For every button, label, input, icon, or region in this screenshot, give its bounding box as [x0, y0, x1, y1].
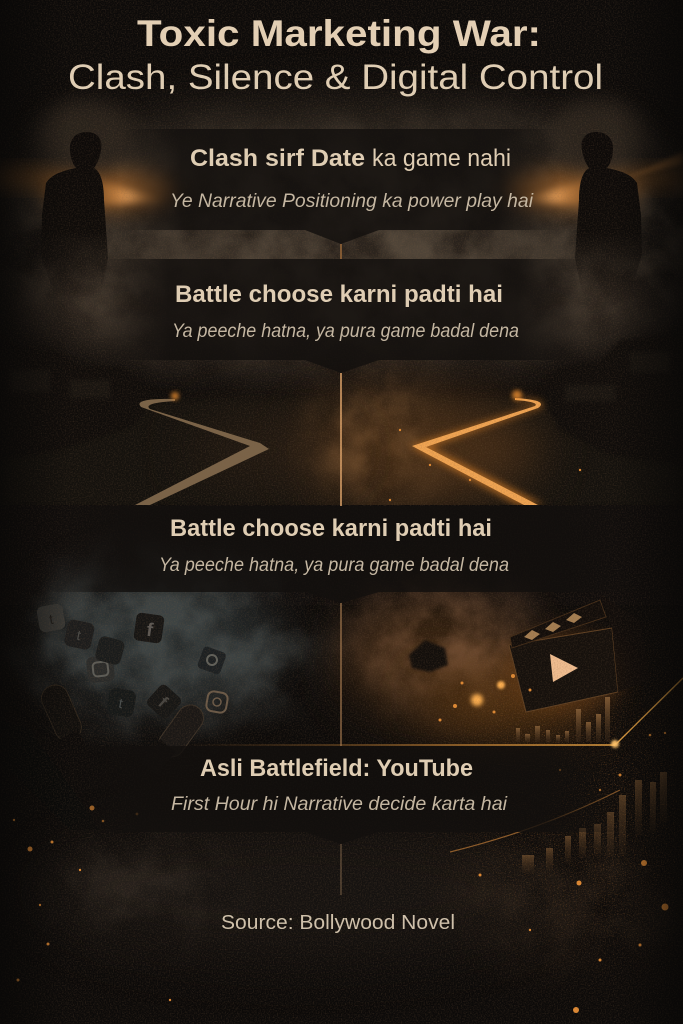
ember specks [406, 600, 683, 1002]
panel 3 shape [40, 506, 645, 603]
panel 1 heading [190, 145, 511, 172]
upper haze [10, 105, 683, 370]
panel 4 heading: Asli Battlefield: YouTube [200, 755, 473, 782]
small bar chart [516, 697, 610, 742]
large bar chart [522, 772, 667, 873]
title line 1: Toxic Marketing War: [137, 13, 541, 54]
icon: twitter faded: t [48, 611, 55, 627]
panel 3 heading: Battle choose karni padti hai [170, 515, 492, 542]
panel 1 shape [120, 129, 560, 244]
dark debris [409, 640, 448, 672]
panel 1 heading: ka game nahi [372, 145, 511, 172]
panel: clash [120, 129, 560, 244]
microphone right [141, 700, 209, 775]
icon: facebook [133, 612, 165, 644]
icon: twitter [63, 619, 95, 651]
icon: blank tile [94, 635, 126, 666]
glowing rising line [180, 678, 683, 748]
icon: instagram [86, 655, 115, 683]
left rubble [0, 350, 155, 460]
panel: battle two [40, 506, 645, 603]
panel 1 subtext: Ye Narrative Positioning ka power play hai [170, 191, 534, 212]
icon: twitter lower [106, 687, 137, 718]
title line 2: Clash, Silence & Digital Control [68, 58, 603, 97]
icon: facebook: f [145, 620, 155, 642]
road fires [171, 390, 522, 400]
social media icons [36, 603, 229, 721]
panel: battle one [100, 259, 585, 373]
panel 2 heading: Battle choose karni padti hai [175, 281, 503, 308]
panel 1 heading: Clash sirf Date [190, 145, 365, 172]
road left [135, 399, 269, 505]
clapperboard video icon [505, 594, 650, 712]
icon: twitter: t [75, 627, 82, 643]
panel 2 shape [100, 259, 585, 373]
lower scene haze [0, 505, 683, 960]
right figure glow [501, 100, 683, 210]
panel 4 subtext: First Hour hi Narrative decide karta hai [171, 794, 508, 815]
icon: facebook lower [145, 683, 183, 721]
embers [13, 429, 669, 1013]
icon: twitter lower: t [118, 695, 124, 711]
icon: facebook lower: f [155, 693, 172, 711]
panel: youtube [60, 746, 625, 844]
center divider line [340, 244, 342, 895]
icon: play triangle [550, 654, 578, 682]
road right glow [410, 398, 544, 505]
icon: instagram outline [205, 690, 229, 714]
microphone left [0, 681, 100, 830]
icon: twitter faded [36, 603, 66, 633]
trend curve [450, 790, 620, 852]
panel 2 subtext: Ya peeche hatna, ya pura game badal dena [172, 321, 519, 342]
panel 4 shape [60, 746, 625, 844]
title [68, 13, 603, 97]
source line: Source: Bollywood Novel [221, 912, 455, 934]
right silhouette [575, 132, 642, 298]
panel 3 subtext: Ya peeche hatna, ya pura game badal dena [159, 555, 509, 576]
left silhouette [41, 132, 108, 298]
left figure glow [0, 100, 182, 210]
icon: instagram right [197, 646, 227, 675]
right rubble [540, 336, 683, 465]
ground with roads [0, 336, 683, 508]
road right [412, 398, 541, 505]
